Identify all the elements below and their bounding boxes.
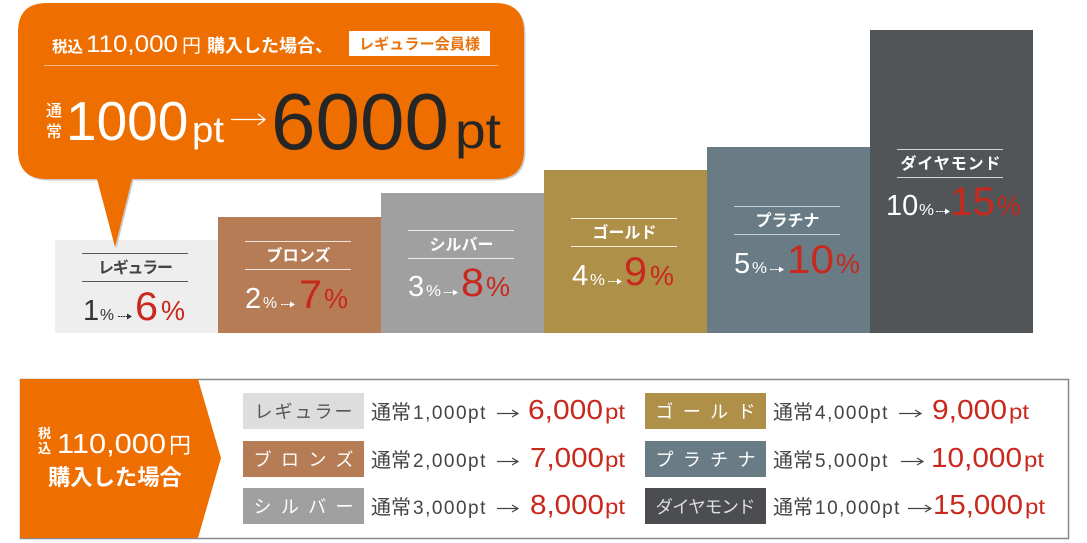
row: gold: 9,000 [932, 394, 1007, 425]
bar: diamond tier: % [997, 190, 1021, 221]
row: silver: 3,000pt [413, 498, 487, 519]
boosted points: 6000 [271, 77, 449, 166]
row: bronze: 2,000pt [413, 451, 487, 472]
callout heading: 購入した場合、 [207, 36, 333, 56]
arrow banner: purchase amount: 税 [38, 426, 51, 441]
row: regular [243, 393, 625, 429]
row: platinum: プラチナ [656, 450, 756, 470]
arrow banner: purchase amount [20, 379, 221, 538]
row: platinum: 5,000pt [815, 451, 889, 472]
normal points [46, 90, 224, 152]
bar: silver tier: 8 [461, 261, 484, 305]
row: silver: 通常 [371, 497, 411, 519]
normal points: 通 [46, 102, 62, 120]
bar: regular tier: 1 [83, 295, 99, 327]
bar: regular tier: % [161, 295, 185, 326]
bar: gold tier: 9 [624, 250, 647, 294]
bar: gold tier: 4 [572, 260, 588, 292]
row: platinum: 10,000 [931, 442, 1022, 473]
boosted points: pt [455, 103, 501, 159]
bar: bronze tier: 7 [299, 273, 322, 317]
bar: silver tier: % [426, 283, 441, 300]
bar: bronze tier [218, 217, 381, 333]
row: regular: レギュラー [254, 402, 352, 422]
bar: platinum tier [707, 147, 870, 333]
row: bronze: pt [605, 449, 625, 472]
bar: silver tier: % [486, 271, 510, 302]
row: platinum: pt [1024, 449, 1044, 472]
bar: diamond tier: 15 [950, 180, 995, 224]
callout heading [52, 31, 490, 58]
bar: gold tier: % [590, 272, 605, 289]
arrow [231, 114, 265, 125]
bar: regular tier: % [100, 307, 114, 324]
row: regular: 通常 [371, 402, 411, 424]
bar: silver tier: 3 [408, 271, 424, 303]
row: silver: 8,000 [530, 489, 604, 520]
row: silver: シルバー [254, 497, 354, 517]
row: diamond: 通常 [773, 497, 813, 519]
row: diamond [645, 488, 1045, 524]
bar: bronze tier: ブロンズ [266, 246, 330, 265]
row: bronze: 通常 [371, 450, 411, 472]
arrow banner: purchase amount: 込 [38, 441, 51, 456]
row: platinum: 通常 [773, 450, 813, 472]
bar: bronze tier: % [324, 283, 348, 314]
callout heading: 円 [182, 36, 201, 57]
callout heading: 110,000 [86, 31, 178, 58]
row: bronze [243, 441, 625, 477]
arrow banner: purchase amount: 110,000 [57, 428, 166, 459]
row: diamond: 10,000pt [815, 498, 901, 519]
row: regular: 6,000 [528, 394, 603, 425]
bar: platinum tier: % [836, 248, 860, 279]
bar: bronze tier: 2 [245, 283, 261, 315]
bar: gold tier: ゴールド [592, 223, 656, 242]
bar: regular tier [55, 240, 218, 333]
bar: bronze tier: % [263, 295, 277, 312]
bar: silver tier [381, 193, 544, 333]
row: bronze: 7,000 [530, 442, 604, 473]
normal points: 1000 [66, 90, 188, 152]
bar: platinum tier: 5 [734, 248, 750, 280]
normal points: pt [192, 109, 224, 150]
bar: diamond tier: % [919, 202, 934, 219]
bar: diamond tier: 10 [886, 190, 918, 222]
row: regular: pt [605, 401, 625, 424]
bar: regular tier: 6 [135, 285, 158, 329]
row: gold: ゴールド [656, 402, 756, 422]
bar: diamond tier [870, 30, 1033, 333]
row: gold [645, 393, 1029, 429]
row: regular: 1,000pt [413, 403, 487, 424]
bar: gold tier: % [650, 260, 674, 291]
row: silver [243, 488, 625, 524]
arrow banner: purchase amount: 円 [169, 433, 191, 458]
row: diamond: ダイヤモンド [656, 497, 756, 517]
row: diamond: 15,000 [933, 489, 1023, 520]
bar: silver tier: シルバー [430, 237, 494, 254]
callout heading: 税込 [52, 38, 84, 56]
arrow banner: purchase amount: 購入した場合 [48, 465, 182, 490]
row: silver: pt [605, 496, 625, 519]
bar: diamond tier: ダイヤモンド [900, 154, 1000, 173]
bar: gold tier [544, 170, 707, 333]
row: gold: pt [1009, 401, 1029, 424]
bar: platinum tier: プラチナ [756, 212, 820, 230]
callout heading: レギュラー会員様 [359, 35, 480, 53]
bar: regular tier: レギュラー [98, 259, 173, 277]
normal points: 常 [46, 123, 62, 141]
row: bronze: ブロンズ [254, 449, 354, 470]
bar: platinum tier: 10 [787, 238, 834, 282]
bar: platinum tier: % [752, 260, 767, 277]
panel: points table [20, 379, 1068, 538]
row: diamond: pt [1025, 496, 1045, 519]
row: gold: 4,000pt [815, 403, 889, 424]
row: gold: 通常 [773, 402, 813, 424]
callout bubble: regular member example [18, 3, 526, 248]
row: platinum [645, 441, 1044, 477]
